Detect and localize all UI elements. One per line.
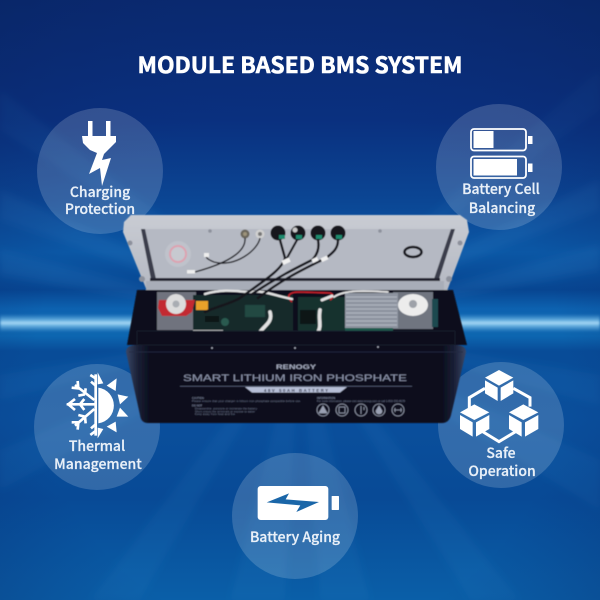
icon: snowflake and sun xyxy=(67,372,128,438)
caution text: Keep away from heat and fire xyxy=(195,412,236,416)
icon: plug with bolt xyxy=(82,121,116,186)
battery lid xyxy=(123,215,469,291)
battery tray xyxy=(127,290,467,345)
caution text: DO NOT xyxy=(192,404,203,408)
brand logo: RENOGY xyxy=(276,365,316,371)
panel: battery cell balancing xyxy=(436,104,562,230)
label: charging protection: Charging xyxy=(70,182,130,202)
indicator ring xyxy=(165,241,191,267)
label: battery aging: Battery Aging xyxy=(250,527,340,547)
caution text xyxy=(192,396,301,416)
panel: safe operation xyxy=(438,362,564,488)
battery body xyxy=(126,331,466,423)
panel: battery aging xyxy=(232,453,358,579)
label: battery cell balancing: Battery Cell xyxy=(462,179,540,199)
battery xyxy=(123,215,469,423)
icon: three connected cubes xyxy=(460,370,538,442)
label: thermal management: Thermal xyxy=(69,436,125,456)
voltage label xyxy=(245,387,347,393)
label: charging protection: Protection xyxy=(65,199,135,219)
red wire xyxy=(289,292,333,302)
information text xyxy=(317,396,406,403)
circuit boards xyxy=(157,240,438,334)
panel: charging protection xyxy=(37,108,163,234)
label: safe operation: Operation xyxy=(468,461,536,481)
black ring xyxy=(404,247,422,257)
caution text: Short circuit the terminals or expose to water xyxy=(195,410,255,414)
product name: SMART LITHIUM IRON PHOSPHATE xyxy=(183,373,407,383)
label: thermal management: Management xyxy=(54,454,142,474)
icon: battery with bolt xyxy=(258,486,339,520)
title: MODULE BASED BMS SYSTEM xyxy=(138,48,462,80)
label: safe operation: Safe xyxy=(486,443,516,463)
label: charging protection xyxy=(65,182,135,219)
black cable bundle xyxy=(205,240,338,312)
safety icons xyxy=(317,404,404,416)
label: battery cell balancing xyxy=(462,179,540,218)
label: thermal management xyxy=(54,436,142,474)
icon: two batteries xyxy=(471,129,532,178)
caution text: CAUTION xyxy=(192,396,204,400)
voltage label: 48V 50AH BATTERY xyxy=(264,388,328,393)
information text: INFORMATION xyxy=(317,396,335,400)
thin wires xyxy=(195,238,260,272)
caution text: Disassemble, puncture or incinerate the battery xyxy=(195,406,258,410)
label: safe operation xyxy=(468,443,536,481)
white wire bundles xyxy=(205,291,388,332)
cable glands xyxy=(270,226,346,240)
label: battery cell balancing: Balancing xyxy=(469,198,535,218)
panel: thermal management xyxy=(34,364,160,490)
information text: For more information, please visit www.renogy.com or call 1-800-330-8678 xyxy=(317,399,406,403)
metal connectors xyxy=(240,230,264,238)
caution text: Please ensure that your charger is lithium iron phosphate compatible before use. xyxy=(192,399,301,403)
